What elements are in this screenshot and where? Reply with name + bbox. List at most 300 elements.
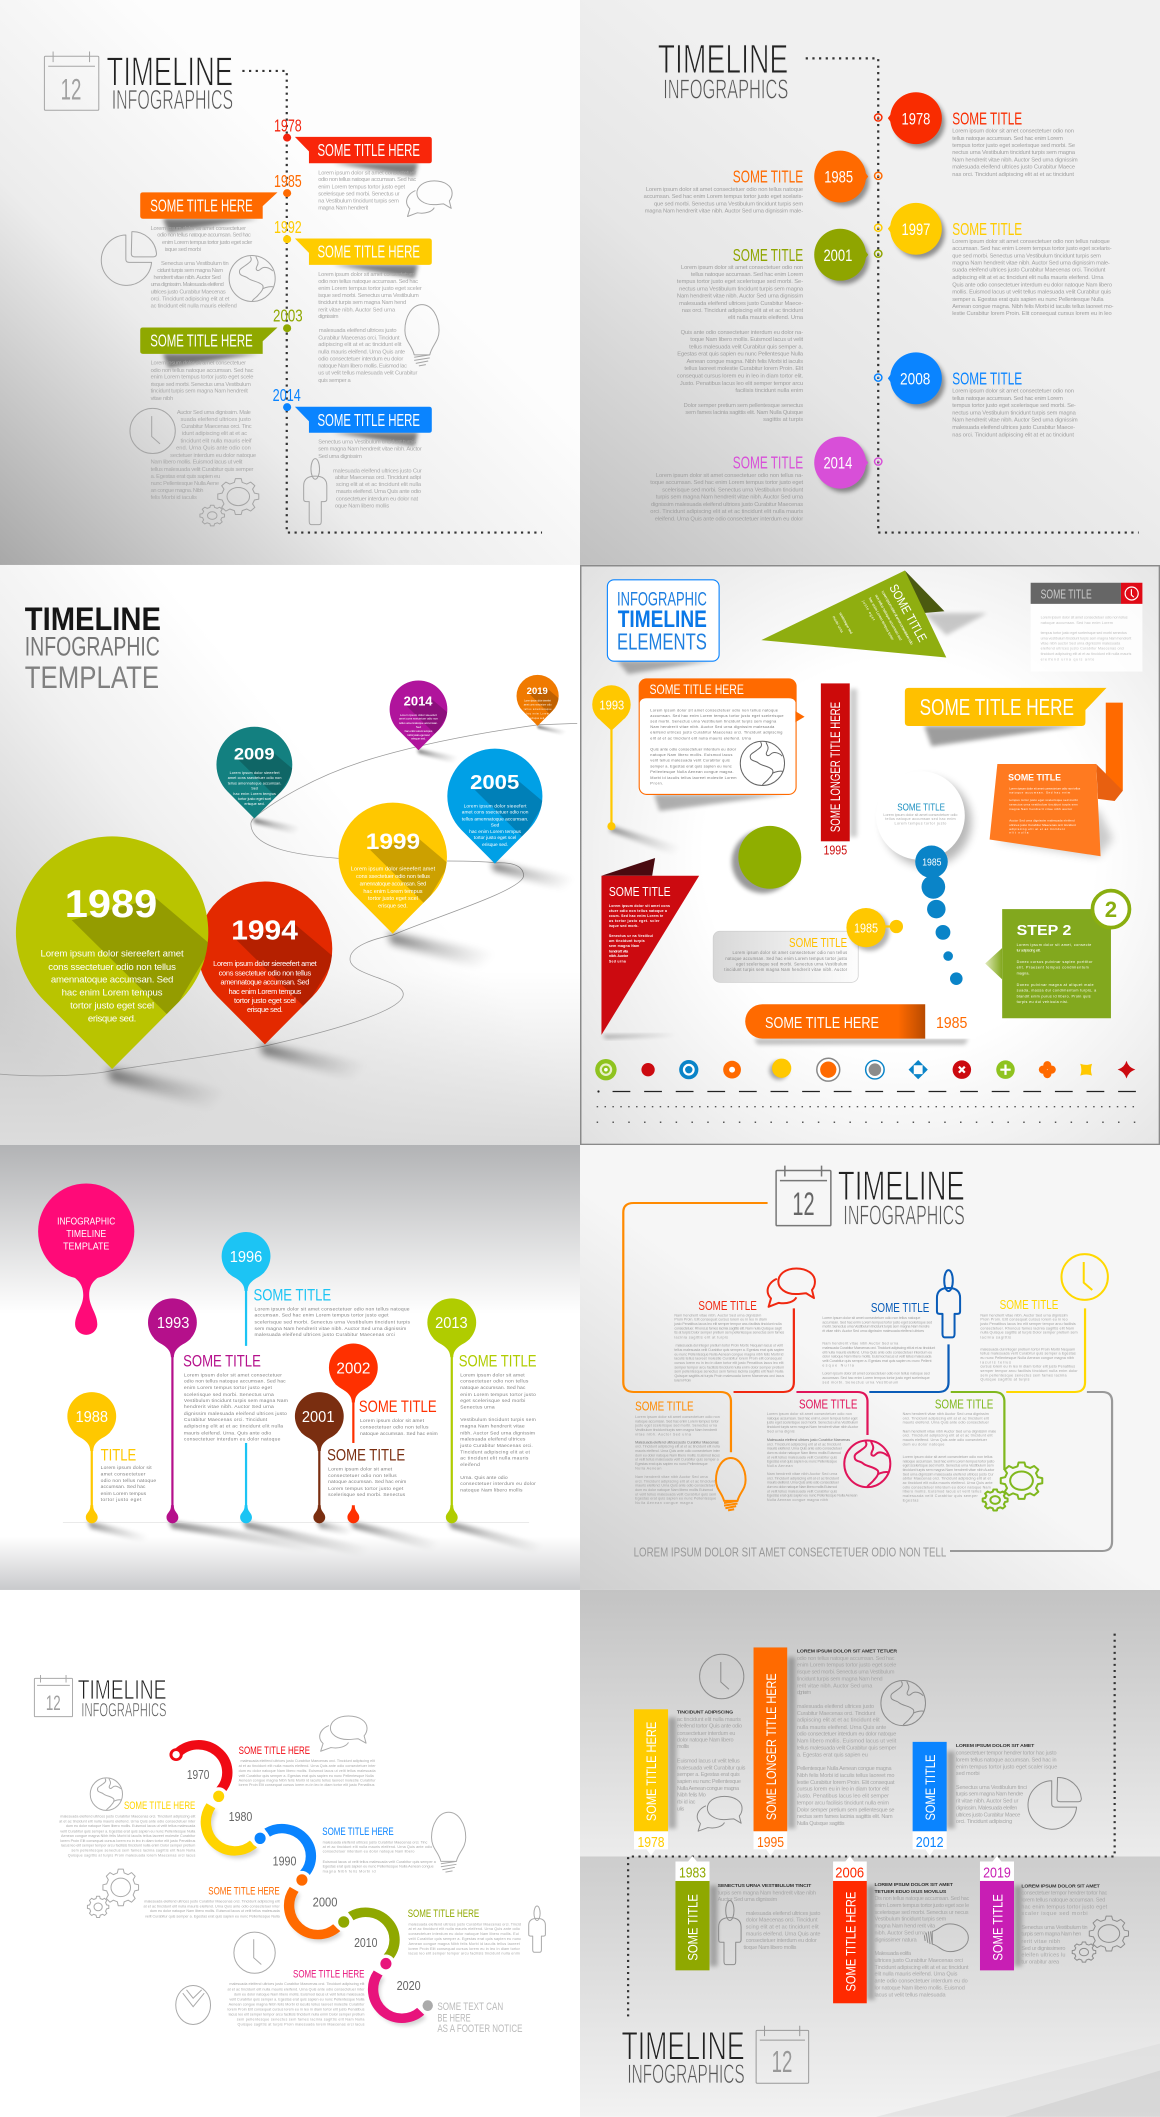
bold sub-headings: LOREM IPSUM DOLOR SIT AMET TETUER bbox=[797, 1649, 898, 1654]
body text: Quis ante odio consectetuer interdum eu dolor natoque Nam libero bbox=[952, 282, 1112, 288]
body text: Auctor Sed urna dignissim bbox=[718, 1897, 778, 1903]
bar 2019: SOME TITLE bbox=[990, 1894, 1006, 1961]
body text: accumsan. Sed hac enim Lorem tempus tortor justo eget scelerisque sed bbox=[822, 1320, 932, 1324]
body text: felis Morbi id iaculis bbox=[151, 495, 197, 501]
body text: orci. Tincidunt adipiscing bbox=[956, 1819, 1012, 1825]
heading: 12 bbox=[792, 1187, 815, 1223]
bold sub-headings bbox=[677, 1649, 1100, 1895]
pin 1999: 1999 bbox=[366, 829, 420, 854]
body text: dum eu dolor natoque bbox=[903, 1442, 944, 1446]
body text: at et ac tincidunt elit nulla mauris eleifend. Urna Quis ante odio consectetuer inter bbox=[59, 1820, 196, 1823]
body text: Senectus urna Vestibulum tin bbox=[161, 261, 229, 267]
body text: at et ac tincidunt elit nulla mauris eleifend. Urna Quis ante odio bbox=[323, 1845, 432, 1849]
bar 2012: 2012 bbox=[916, 1835, 944, 1851]
grey header card with clock: vitae nibh auctor Sed urna dignissim malesuada bbox=[1041, 642, 1121, 646]
body text: tellus malesuada velit Curabitur quis semper a. bbox=[689, 344, 804, 350]
body text: Justo. Penatibus lacus leo elit semper tempor arcu bbox=[680, 381, 803, 387]
body text: scelerisque sed morbi. Senectus bbox=[328, 1492, 406, 1498]
body text: tellus malesuada velit Curabitur quis semper a. Egestas erat quis sapien bbox=[674, 1348, 784, 1352]
pink heading pin: TEMPLATE bbox=[63, 1241, 109, 1252]
bar 1983: 1983 bbox=[679, 1865, 706, 1881]
grey header card with clock: tempus tortor justo eget scelerisque sed morbi senectus bbox=[1041, 631, 1127, 635]
body text: tincidunt turpis sem magna Nam hendrerit bbox=[151, 389, 248, 395]
pin 2009: hac enim Lorem tempus bbox=[233, 792, 276, 796]
body text bbox=[634, 1313, 1079, 1505]
body text: Euismod lacus ut velit tellus bbox=[677, 1759, 740, 1765]
body text: sapien eu nunc Pellentesque bbox=[677, 1779, 741, 1785]
body text: consectetuer interdum eu bbox=[677, 1731, 735, 1737]
body text: Lorem ipsum dolor sit amet consectetuer odio non bbox=[952, 129, 1074, 135]
body text: lorem Proin bbox=[674, 1378, 691, 1382]
pin 2014 bbox=[390, 680, 448, 750]
section titles: SOME TITLE HERE bbox=[293, 1969, 365, 1980]
footer text: LOREM IPSUM DOLOR SIT AMET CONSECTETUER ODIO NON TELL bbox=[634, 1545, 946, 1559]
grey card with yellow 1985: eget scelerisque sed morbi. Senectus urna Vestibulum bbox=[736, 962, 848, 967]
body text: rerit vitae nibh. Auctor Sed urna bbox=[797, 1684, 872, 1689]
body text: Lorem ipsum dolor sit bbox=[101, 1465, 152, 1471]
pin 1996: SOME TITLE bbox=[253, 1286, 331, 1304]
body text: Vestibulum tincidunt turpis sem bbox=[875, 1917, 947, 1923]
body text: odio non tellus natoque bbox=[101, 1478, 157, 1484]
body text: ulis bbox=[677, 1807, 685, 1813]
panel 2: bubble timeline bbox=[580, 0, 1160, 565]
pin 1993: SOME TITLE bbox=[183, 1351, 261, 1370]
body text: malesuada eleifend ultrices justo Curabitur Maece- bbox=[679, 301, 803, 307]
bubble 1985: SOME TITLE bbox=[733, 167, 803, 187]
arcs bbox=[176, 1745, 421, 2018]
heading: TIMELINE bbox=[838, 1163, 965, 1209]
body text: dum eu dolor natoque Nam libero mollis Euismod bbox=[767, 1485, 837, 1489]
body text: Egestas erat quis sapien eu nunc Pellentesque Nulla bbox=[677, 352, 804, 358]
body text: magna Nibh felis Morbi id bbox=[323, 1870, 376, 1874]
bar 1995 bbox=[754, 1647, 795, 1855]
body text: velit Curabitur quis semper a. Egestas erat quis sapien eu nunc bbox=[408, 1937, 521, 1941]
ribbon 2003 bbox=[140, 306, 303, 368]
orange folded paper: natoque accumsan. Sed hac enim bbox=[1009, 791, 1071, 795]
heading bbox=[621, 2023, 809, 2089]
green step card: Donec pulvinar magna at aliquet male bbox=[1017, 983, 1094, 987]
heading: TIMELINE bbox=[621, 2023, 745, 2068]
body text: velit Curabitur quis semper a. Egestas erat quis sapien eu nunc Pellentesque Nulla bbox=[145, 1914, 280, 1918]
pin 2009 bbox=[216, 727, 294, 818]
red triangle: um tincidunt turpis bbox=[609, 939, 645, 943]
green step card: STEP 2 bbox=[1017, 923, 1071, 939]
pin 2013: 2013 bbox=[435, 1315, 468, 1332]
body text: Lorem ipsum dolor sit amet consectetuer odio non bbox=[767, 1412, 852, 1416]
body text: elit nulla mauris eleifend. Urna bbox=[728, 315, 804, 321]
footer notice bbox=[437, 2000, 523, 2035]
body text: Nam hendrerit vitae nibh Auctor Sed urna dignissim male bbox=[903, 1429, 996, 1433]
body text: mollis. Euismod lacus ut velit tellus malesuada velit Curabitur quis bbox=[952, 290, 1111, 296]
body text: malesuada eleifend ultrices justo Curabitur Maecenas orci bbox=[255, 1332, 395, 1338]
body text: Curabitur Maecenas orci. Tincidunt bbox=[184, 1417, 268, 1423]
pin 1993 bbox=[592, 685, 691, 857]
yellow ribbon: SOME TITLE HERE bbox=[920, 694, 1074, 720]
body text: Sed urna dignis bbox=[767, 1429, 795, 1433]
green step card: suada, massa dui condimentum turpis, a bbox=[1017, 989, 1097, 993]
body text: orci. Tincidunt adipiscing elit at et ac tincidunt bbox=[767, 1476, 839, 1480]
body text: enim Lorem tempus tortor justo bbox=[460, 1392, 536, 1398]
body text: nunc Pellentesque Nulla Aene bbox=[151, 481, 219, 487]
body text: que sed morbi. Senectus urna Vestibulum tincidunt turpis sem bbox=[952, 253, 1101, 259]
green step card: Lorem ipsum dolor sit amet, consecte bbox=[1017, 943, 1091, 947]
pin 2002: 2002 bbox=[336, 1360, 370, 1377]
pink heading pin: TIMELINE bbox=[66, 1229, 106, 1240]
pin 1994: tortor justo eget scel bbox=[234, 996, 296, 1005]
arc node dots bbox=[171, 1750, 433, 2011]
red triangle: ccum. Sed hac enim Lorem te bbox=[609, 914, 663, 918]
orange folded paper bbox=[990, 703, 1123, 857]
bar 1978: SOME TITLE HERE bbox=[643, 1722, 659, 1821]
bar 1995: 1995 bbox=[757, 1835, 784, 1851]
ground shadows bbox=[108, 725, 583, 1112]
white circle card: Lorem tempus tortor justo bbox=[895, 821, 946, 825]
body text: nectus sem fames lacinia sagittis elit. Nam bbox=[797, 1814, 893, 1820]
body text: us ut velit tellus malesuada velit Curabitur bbox=[318, 371, 417, 377]
body text: turpis sem magna Nam hendre bbox=[956, 1792, 1023, 1798]
body text: malesuada eleifend ultrices justo Curabitur Maecenas orci. Tincidunt adipiscing elit bbox=[241, 1759, 375, 1763]
descending blue dots 1985 bbox=[915, 845, 963, 985]
body text: adipiscing elit at et ac tincidunt elit bbox=[318, 342, 402, 348]
white circle card: tellus natoque accumsan sed hac enim bbox=[885, 817, 956, 821]
body text: Senectus urna Vestibulum tinci bbox=[956, 1785, 1027, 1791]
body text: odio non tellus natoque accumsan. Sed hac bbox=[151, 368, 254, 374]
body text: lestie Curabitur lorem Proin. Elit consequat bbox=[797, 1780, 895, 1786]
body text: Lorem ipsum dolor sit amet consectetuer odio non tellus natoque bbox=[646, 187, 803, 193]
body text: iaculis tellus bbox=[980, 1360, 1011, 1364]
body text: sed morbi bbox=[956, 1771, 980, 1777]
body text: nectus urna Vestibulum tincidunt turpis sem magna bbox=[952, 150, 1076, 156]
body text: semper a. Egestas erat quis bbox=[677, 1772, 740, 1778]
heading: TIMELINE bbox=[658, 36, 788, 82]
pin 1989: cons ssectetuer odio non tellus bbox=[48, 962, 176, 973]
body text bbox=[644, 129, 1114, 522]
bar 2006: 2006 bbox=[835, 1865, 864, 1881]
body text: enim tempus tortor justo eget scaler isque bbox=[956, 1765, 1057, 1770]
section titles: SOME TITLE HERE bbox=[124, 1801, 196, 1812]
pin 2014: 2014 bbox=[404, 695, 433, 709]
body text: velit Curabitur quis semper a. Egestas erat quis sapien eu nunc Pellentesque Nulla bbox=[229, 1998, 364, 2002]
ribbon 2014: SOME TITLE HERE bbox=[317, 410, 420, 430]
body text: Lorem ipsum dolor sit amet consectetuer bbox=[151, 361, 246, 367]
panel 1: ribbon timeline bbox=[0, 0, 580, 565]
body text: odio non tellus natoque accumsan. Sed hac bbox=[797, 1656, 895, 1662]
body text: lorem Proin Elit consequat cursus lorem eu in leo in diam tortor elit justo Penatibus bbox=[228, 2008, 365, 2012]
body text: malesuada dui integer pretium tortor Proin Morbi Nequam bbox=[980, 1347, 1075, 1351]
pin 2014: erisque sed. bbox=[411, 737, 426, 741]
bubble 2001: SOME TITLE bbox=[733, 245, 803, 265]
body text: sem pellentesque senectus sem fames lacinia sagittis elit Nam Nulla bbox=[237, 2018, 364, 2021]
footer notice: BE HERE bbox=[437, 2012, 471, 2024]
body text: Quisque sagittis at turpis Proin malesuada lorem Maecenas orci lacus bbox=[674, 1374, 784, 1378]
body text: Dis non tellus natoque accumsan. Sed hac bbox=[875, 1896, 970, 1902]
body text: tempus tortor justo eget scelerisque sed morbi. Se bbox=[952, 143, 1075, 149]
body text: scaler isque sed morbi bbox=[1021, 1911, 1088, 1917]
body text: orci. Tincidunt adipiscing elit at et ac tincidunt elit nulla bbox=[635, 1445, 720, 1449]
orange folded paper: SOME TITLE bbox=[1008, 773, 1062, 784]
body text: eleifend bbox=[460, 1462, 480, 1468]
body text: lorem tellus natoque accumsan. Sed hac in bbox=[956, 1758, 1057, 1763]
body text: mauris eleifend. Urna Quis ante odio consectetuer bbox=[903, 1421, 990, 1425]
pin 2001: 2001 bbox=[302, 1409, 334, 1426]
body text: Senectus urna bbox=[460, 1405, 495, 1410]
pin 2009: Sed bbox=[251, 787, 258, 791]
body text: adipiscing elit at et ac tincidunt elit bbox=[797, 1718, 880, 1724]
body text: Quisque sagittis at turpis Proin malesuada lorem Maecenas orci lacus bbox=[238, 2023, 365, 2026]
grey card with yellow 1985: Lorem ipsum dolor sit amet consectetuer odio non tellus bbox=[732, 950, 847, 955]
body text: elit nulla mauris eleifend. Urna Quis ante odio consectetuer interdum eu bbox=[822, 1350, 932, 1354]
body text: Nibh felis Mo bbox=[677, 1793, 706, 1799]
body text: quis semper a bbox=[318, 378, 352, 384]
body text: enim Lorem tempus tortor justo eget scele bbox=[151, 375, 253, 381]
red triangle: SOME TITLE bbox=[609, 884, 671, 899]
body text: scelerisque sed morbi. Senectus ur necus bbox=[875, 1910, 969, 1916]
pin 1999: tortor justo eget scel bbox=[368, 896, 418, 902]
pin 2005: Lorem ipsum dolor sieeefert bbox=[464, 803, 527, 809]
decade labels: 1970 bbox=[187, 1767, 209, 1782]
pin 2019: Lorem ipsum dolor sieeefert bbox=[524, 700, 551, 703]
body text: tellus laoreet molestie Curabitur lorem Proin. Elit bbox=[684, 366, 804, 372]
red triangle: us tortor justo eget. scler bbox=[609, 919, 660, 923]
section titles: SOME TITLE HERE bbox=[322, 1826, 394, 1838]
orange bordered text box: Pellentesque Nulla Aenean congue magna. bbox=[650, 769, 734, 774]
pin 2019: hac enim Lorem bbox=[527, 712, 549, 715]
descending blue dots 1985: 1985 bbox=[922, 857, 942, 868]
dash and dot dividers bbox=[597, 1090, 1137, 1122]
pin 2013 bbox=[427, 1298, 536, 1523]
decade labels bbox=[187, 1767, 421, 1993]
yellow ribbon bbox=[905, 688, 1107, 746]
bold sub-headings: LOREM IPSUM DOLOR SIT AMET bbox=[956, 1743, 1034, 1749]
green step card: 2 bbox=[1105, 897, 1117, 922]
heading: INFOGRAPHICS bbox=[663, 74, 788, 104]
body text: facilisis tincidunt nulla enim bbox=[735, 388, 803, 394]
body text: eget scelerisque sed morbi bbox=[460, 1398, 525, 1404]
bubble 1978: 1978 bbox=[902, 110, 930, 128]
body text: cidunt turpis sem magna Nam bbox=[157, 268, 223, 274]
ribbon 1978: SOME TITLE HERE bbox=[317, 140, 420, 160]
bar 2006 bbox=[833, 1856, 875, 2003]
body text: Pellentesque Nulla Aenean congue magna bbox=[797, 1766, 892, 1772]
ribbon 1985 bbox=[140, 171, 302, 232]
ribbon 1992: SOME TITLE HERE bbox=[317, 242, 420, 262]
body text: sem pellentesque senectus sem fames lacinia sagittis elit Nam Nulla bbox=[71, 1849, 195, 1853]
bar 1978: 1978 bbox=[638, 1835, 665, 1851]
body text: tur orabitur area bbox=[1021, 1960, 1059, 1966]
body text: lestie Curabitur lorem Proin. Elit consequat cursus lorem eu in leo bbox=[952, 311, 1112, 317]
bubble 1997: SOME TITLE bbox=[952, 219, 1022, 239]
bold sub-headings: TINCIDUNT ADIPISCING bbox=[677, 1710, 733, 1716]
heading bbox=[776, 1163, 965, 1231]
body text: esque Nulla bbox=[822, 1363, 854, 1367]
body text: Lorem ipsum dolor sit amet consectetuer odio non tellus bbox=[903, 1455, 993, 1459]
body text: Lorem tempus tortor justo eget bbox=[328, 1486, 404, 1492]
body text: Aenean congue magna Nibh felis Morbi id iaculis tellus laoreet bbox=[408, 1942, 520, 1946]
section titles: SOME TITLE bbox=[1000, 1297, 1058, 1312]
body text: mauris eleifend. Urna. Quis ante odio bbox=[184, 1430, 272, 1436]
body text: magna Nam hendrerit vitae nibh. Auctor Sed urna dignissim male- bbox=[952, 261, 1110, 266]
body text: eleifen ultrices lu bbox=[1021, 1953, 1065, 1958]
orange folded paper: Lorem ipsum dolor sit amet consectetuer odio non tellus bbox=[1009, 787, 1081, 791]
body text: natoque accumsan. Sed hac enim bbox=[360, 1431, 438, 1437]
body text: lorem Proin Elit consequat cursus lorem eu in leo in diam tortor bbox=[408, 1947, 521, 1951]
elements title box: INFOGRAPHIC bbox=[617, 590, 707, 611]
body text: malesuada eleifend ultrices justo bbox=[319, 328, 397, 334]
connector lines bbox=[623, 1203, 1112, 1551]
body text: dum eu dolor natoque Nam libero mollis Euismod bbox=[635, 1488, 713, 1492]
orange folded paper: ultrices justo Curabitur Maecenas orci tincidunt bbox=[1009, 823, 1076, 827]
body text: vitae nibh. Auctor Sed urna bbox=[635, 1432, 691, 1436]
body text: nulla mauris eleifend. Urna Quis ante bbox=[318, 350, 405, 355]
body text: sem magna Nam hendrerit vitae nibh. Auctor bbox=[318, 447, 422, 453]
orange title bar 1985: SOME TITLE HERE bbox=[765, 1015, 879, 1032]
body text: natoque accumsan. Sed hac enim bbox=[328, 1479, 406, 1485]
body text: malesuada eleifend ultrices justo Curabitur Maece bbox=[952, 165, 1075, 171]
body text: adipiscing elit at et ac tincidunt elit nulla bbox=[184, 1424, 283, 1429]
body text: tincidunt elit nulla mauris eleif bbox=[181, 439, 252, 444]
body text: toque Nam libero mollis. Euismod lacus ut velit bbox=[690, 337, 804, 343]
pin 1994: Lorem ipsum dolor siereefert amet bbox=[213, 959, 317, 968]
body text: malesuada velit Curabitur quis bbox=[677, 1766, 746, 1771]
body text: Egestas erat quis sapien eu nunc Pellentesque bbox=[635, 1497, 716, 1501]
body text: ac tincidunt elit nulla mauris bbox=[677, 1717, 741, 1723]
body text: justo eget scelerisque sed morbi. Senectus urna Vestibulum bbox=[766, 1421, 858, 1425]
body text: Euismod lacus ut velit tellus malesuada velit Curabitur quis semper a bbox=[323, 1860, 436, 1864]
grey card with yellow 1985: 1985 bbox=[854, 921, 878, 935]
body text: enim Lorem tempus bbox=[101, 1491, 147, 1497]
body text: dolor Maecenas orci. Tincidunt bbox=[746, 1918, 818, 1924]
ribbon 1985: 1985 bbox=[274, 171, 302, 191]
body text: Vestibulum tincidunt turpis sem magna Nam bbox=[184, 1398, 288, 1404]
body text: Nam libero mollis. Euismod lacus ut velit bbox=[151, 460, 243, 466]
body text: Urna. Quis ante odio bbox=[460, 1475, 508, 1481]
body text: Malesuada eleifend ultrices justo Curabitur Maecenas bbox=[767, 1438, 850, 1442]
heading: INFOGRAPHICS bbox=[627, 2058, 745, 2089]
icons bbox=[101, 181, 452, 526]
body text: accumsan. Sed hac bbox=[101, 1484, 146, 1490]
pin 1994: 1994 bbox=[231, 914, 298, 945]
body text: natoque accumsan. Sed hac enim Lorem tempus tortor eget bbox=[767, 1416, 858, 1420]
ribbon 1992: 1992 bbox=[274, 217, 302, 237]
body text: malesuada eleifend ultrices justo Cur bbox=[333, 468, 422, 474]
body text: odio consectetuer interdum eu dolor natoque Nam bbox=[903, 1485, 991, 1489]
body text: tincidunt turpis sem magna Nam hend bbox=[318, 300, 406, 306]
heading: INFOGRAPHIC bbox=[25, 632, 160, 662]
body text: scing elit at et ac tincidunt elit nulla bbox=[336, 482, 422, 488]
pink heading pin: INFOGRAPHIC bbox=[57, 1216, 116, 1228]
body text: eleifend tortor Quis ante odio bbox=[677, 1724, 742, 1730]
body text: sem magna Nam hendrerit vitae nibh. Auctor Sed urna dignissim bbox=[255, 1326, 406, 1332]
body text: dum eu dolor natoque Nam libero mollis. Euismod lacus ut velit tellus malesuada bbox=[234, 1993, 364, 1997]
body text: na Vestibulum tincidunt turpis sem bbox=[318, 199, 399, 204]
body text: nulla mauris eleifend. Urna Quis ante bbox=[797, 1725, 886, 1731]
body text: Sed urna dignissim malesuada eleifend ultrices justo Cur bbox=[903, 1472, 995, 1476]
bubble 2014: SOME TITLE bbox=[733, 453, 803, 472]
ribbon 1985: SOME TITLE HERE bbox=[150, 196, 253, 215]
body text: mauris eleifend. Urna Quis ante bbox=[746, 1932, 821, 1937]
body text: lacus ut velit tellus malesuada bbox=[875, 1993, 946, 1998]
pin 2019: amet cons ssectetuer odio bbox=[524, 704, 552, 707]
body text: ut velit tellus malesuada velit Curabitur quis sem bbox=[635, 1492, 716, 1496]
section titles bbox=[124, 1745, 479, 1980]
bubble 1997: 1997 bbox=[902, 220, 930, 239]
body text: accumsan. Sed hac enim Lorem tempus tortor justo eget scelerisque bbox=[822, 1376, 930, 1380]
body text: magna Nam hend rerit vita bbox=[875, 1924, 935, 1930]
vertical red bar 1995 bbox=[821, 683, 857, 857]
grey header card with clock: eleifend ultrices justo Curabitur Maecenas orci bbox=[1041, 647, 1124, 651]
body text: nibh. Auctor Sed urna dignissim bbox=[460, 1430, 535, 1436]
pin 2014: tellus amennatoque accumsan. bbox=[399, 721, 438, 725]
pin 1989: tortor justo eget scel bbox=[70, 1001, 154, 1012]
red triangle: hendrerit vita bbox=[609, 949, 628, 953]
red triangle: sem magna Nam bbox=[609, 944, 639, 948]
pin 1999: erisque sed. bbox=[378, 904, 408, 910]
body text: dolor natoque Nam libero mollis. Euismod lacus ut velit tellus malesuada bbox=[822, 1355, 932, 1359]
orange folded paper: tempus tortor justo eget scelerisque sed morbi bbox=[1009, 798, 1078, 802]
body text: consectetuer interdum eu dolor bbox=[460, 1481, 536, 1487]
body text: isque sed morbi bbox=[165, 247, 201, 253]
bubble 2008: 2008 bbox=[900, 370, 930, 388]
bold sub-headings: SENECTUS URNA VESTIBULUM TINCIT bbox=[718, 1883, 811, 1889]
bar 1983 bbox=[675, 1856, 718, 1970]
body text: orci. Tincidunt adipiscing elit at et ac tincidunt bbox=[635, 1479, 715, 1483]
pin 2005: amet cons ssectetuer odio non bbox=[462, 810, 529, 816]
bubble 2001 bbox=[733, 229, 882, 284]
body text: Nam hendrerit vitae nibh. Auctor Sed urna dignissim bbox=[674, 1313, 761, 1317]
body text: tellus malesuada velit Curabitur quis semper bbox=[151, 467, 254, 473]
body text: scelerisque sed morbi. Senectus urna bbox=[184, 1392, 274, 1398]
orange bordered text box: natoque Nam libero mollis. Euismod lacus bbox=[650, 752, 733, 757]
section titles: SOME TITLE HERE bbox=[208, 1886, 280, 1897]
body text: scelerisque sed morbi. Senectus ur bbox=[318, 192, 400, 198]
body text: Egestas bbox=[903, 1498, 919, 1502]
body text: ac tincidunt elit nulla mauris eleifend. Urna Quis ante bbox=[903, 1481, 993, 1485]
body text: at et ac tincidunt elit nulla mauris eleifend. Urna Quis ante odio consectetuer inter bbox=[228, 1988, 365, 1991]
white circle card: SOME TITLE bbox=[897, 802, 945, 813]
orange bordered text box: sed morbi. Senectus urna Vestibulum tincidunt turpis sem magna bbox=[650, 719, 777, 724]
body text: lorem Proin Elit consequat cursus lorem eu in leo in diam tortor elit justo Penatibus bbox=[60, 1839, 196, 1843]
body text: hendrerit vitae nibh. Auctor Sed bbox=[154, 275, 221, 281]
body text: Malesuada eolifa bbox=[875, 1951, 911, 1957]
body text: sagittis at turpis bbox=[763, 417, 803, 423]
body text: consectetuer. Rhoncus fames lacinia sagittis elit. Nam nulla Quisque sagit bbox=[674, 1326, 782, 1330]
bubble 2001: 2001 bbox=[823, 246, 852, 265]
body text: justo Curabitur Maecenas orci. bbox=[459, 1443, 533, 1449]
bar 2006: SOME TITLE HERE bbox=[843, 1892, 859, 1992]
orange title bar 1985: 1985 bbox=[936, 1015, 967, 1032]
body text: nas orci. Tincidunt adipiscing elit at et ac tincidunt bbox=[952, 432, 1074, 438]
vertical red bar 1995: 1995 bbox=[823, 842, 847, 857]
body text: magna Nam hendrerit vitae bbox=[460, 1424, 525, 1429]
body text: dignissim malesuada eleifend ultrices justo Curabitur Maecenas bbox=[651, 502, 803, 508]
pin 1994: amennatoque accumsan. Sed bbox=[221, 978, 309, 987]
ribbon 2003: 2003 bbox=[273, 306, 303, 326]
green step card bbox=[985, 891, 1129, 1018]
orange bordered text box: Proin. bbox=[650, 780, 663, 785]
body text: Lorem ipsum dolor sit amet consectetuer bbox=[151, 226, 246, 232]
body text: velit Curabitur quis semper a. Egestas erat quis sapien eu nunc Pellentesque Nulla bbox=[239, 1774, 374, 1778]
body text: Tincidunt adipiscing elit at et bbox=[460, 1450, 531, 1455]
orange title bar 1985 bbox=[745, 1004, 976, 1045]
body text: mollis bbox=[677, 1744, 690, 1750]
bold sub-headings: LOREM IPSUM DOLOR SIT AMET bbox=[1021, 1884, 1100, 1889]
pin 2002 bbox=[329, 1344, 437, 1523]
body text: Nam hendrerit vitae nibh Auctor Sed urna dignissim bbox=[903, 1412, 989, 1416]
body text: accumsan. Sed hac enim Lorem tempus tortor justo eget bbox=[255, 1313, 389, 1319]
body text: Tincidunt adipiscing elit at et ac tincidunt bbox=[875, 1965, 969, 1971]
body text: Lorem ipsum dolor sit amet consectetuer odio non tellus natoque bbox=[822, 1316, 920, 1320]
body text: abitur Maecenas orci. Tincidunt adipi bbox=[335, 475, 421, 481]
